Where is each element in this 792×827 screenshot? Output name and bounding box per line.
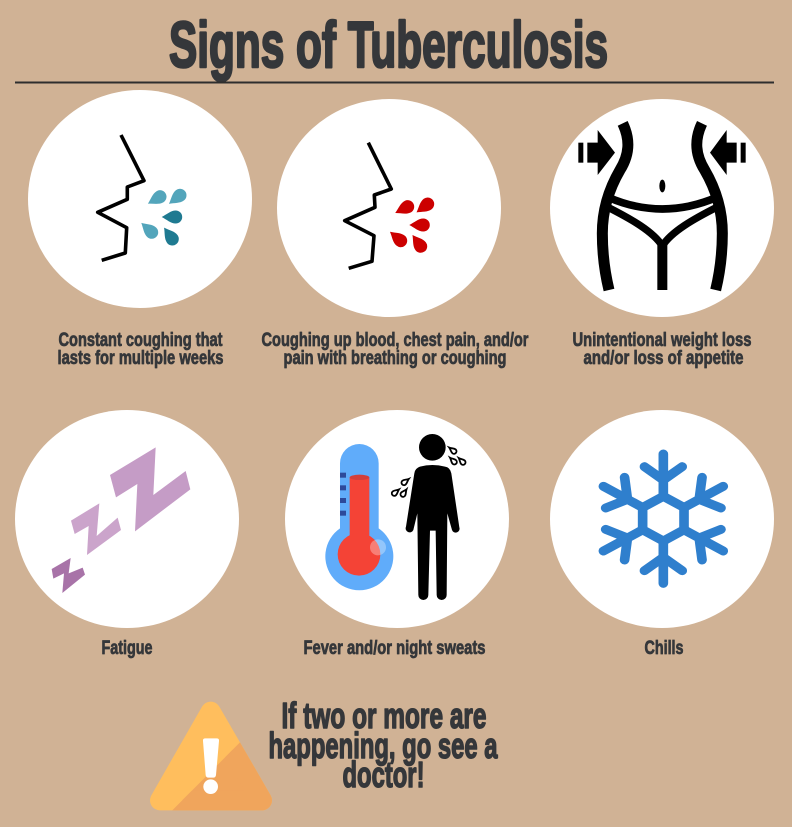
label: fatigue: Fatigue	[102, 638, 152, 659]
icon: waist with arrows	[578, 123, 746, 290]
label: blood: pain with breathing or coughing	[284, 348, 506, 369]
circle: weight loss	[550, 99, 774, 317]
panel: chills	[550, 410, 774, 659]
circle: blood	[277, 99, 501, 317]
label: weight loss	[572, 330, 752, 369]
panel: fever	[285, 410, 509, 659]
icon: blood droplets	[386, 195, 437, 255]
label: coughing: Constant coughing that	[58, 330, 223, 351]
panel: fatigue	[15, 410, 239, 659]
label: blood	[262, 330, 529, 369]
label: coughing	[58, 330, 224, 369]
icon: sweating person	[391, 434, 467, 600]
icon: warning triangle	[160, 712, 262, 800]
circle: chills	[550, 410, 774, 628]
callout: see a doctor: doctor!	[342, 754, 424, 795]
icon: teal droplets	[137, 186, 189, 248]
label: fever: Fever and/or night sweats	[304, 638, 486, 659]
circle: coughing	[28, 90, 252, 308]
callout: see a doctor	[268, 695, 498, 795]
panel: constant coughing	[28, 90, 252, 369]
label: weight loss: and/or loss of appetite	[584, 348, 744, 369]
icon: face profile	[98, 135, 144, 260]
icon: sleeping Z letters	[52, 447, 190, 593]
label: chills: Chills	[644, 638, 684, 659]
callout: see a doctor: If two or more are	[282, 695, 486, 736]
callout: see a doctor: happening, go see a	[268, 725, 498, 766]
icon: thermometer	[325, 444, 393, 590]
panel: weight loss	[550, 99, 774, 369]
icon: face profile	[345, 143, 391, 268]
panel: coughing up blood	[262, 99, 529, 369]
icon: snowflake	[594, 454, 733, 583]
circle: fever	[285, 410, 509, 628]
label: coughing: lasts for multiple weeks	[58, 348, 224, 369]
circle: fatigue	[15, 410, 239, 628]
label: blood: Coughing up blood, chest pain, and/or	[262, 330, 529, 351]
